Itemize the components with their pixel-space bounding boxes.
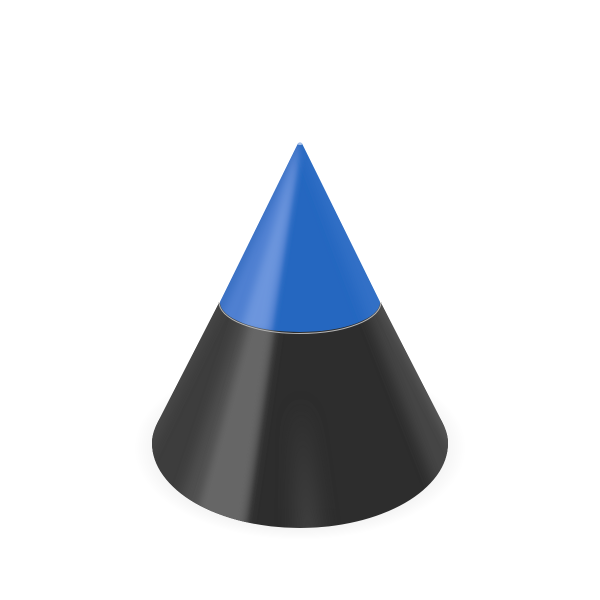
main highlight band <box>182 322 276 522</box>
left tone <box>220 144 299 330</box>
right edge tones <box>367 304 448 484</box>
upper cone section: blue <box>220 142 380 332</box>
seam ring <box>219 302 381 334</box>
right edge tone <box>304 149 380 320</box>
lower cone section: black <box>152 303 448 528</box>
left tone <box>152 303 247 522</box>
illustration: two-part cone <box>150 142 450 531</box>
bottom center glow <box>294 464 321 528</box>
left edge light band <box>152 304 218 449</box>
tip highlight <box>298 142 302 145</box>
main highlight band <box>222 158 299 330</box>
ground shadow <box>134 356 466 540</box>
